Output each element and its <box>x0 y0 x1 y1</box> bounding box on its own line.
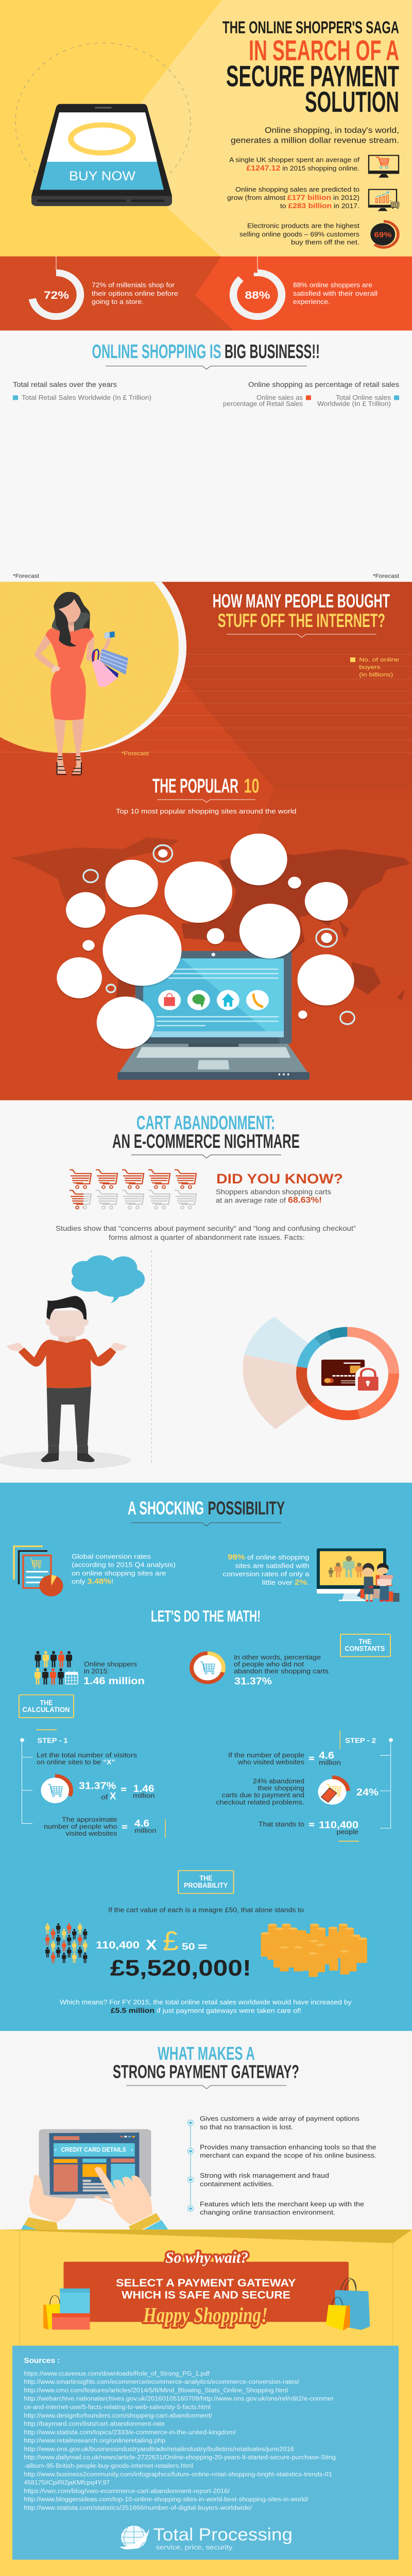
text: global conversion: on online shopping sites are <box>72 1570 166 1577</box>
feature 3: containment activities. <box>200 2180 274 2188</box>
step 2: who visited websites <box>237 1758 304 1766</box>
source links: http://www.ons.gov.uk/businessindustryandtrade/retailindustry/bulletins/retailsales/june2016 <box>24 2445 294 2452</box>
icon: gift boxes and bag <box>43 2289 90 2330</box>
text: global conversion: Global conversion rates <box>72 1553 151 1560</box>
text: global conversion <box>72 1553 176 1586</box>
intro text: generates a million dollar revenue stream. <box>231 135 399 145</box>
text: studies <box>56 1225 356 1242</box>
equation: percentage of X <box>79 1781 154 1802</box>
heading: the popular 10: THE POPULAR <box>152 774 238 797</box>
label: the constants: THE <box>358 1638 371 1646</box>
result: people <box>259 1820 359 1842</box>
intro text <box>231 126 399 145</box>
panel: cart abandonment <box>0 1100 412 1483</box>
text: satisfied sites: sites are satisfied with <box>235 1562 309 1569</box>
icon: smartphone with buy now <box>31 104 172 206</box>
panel: strong payment gateway <box>0 2031 412 2230</box>
source links: http://www.dailymail.co.uk/news/article-2722631/Online-shopping-20-years-It-started-secure-purchase-Sting <box>24 2453 336 2461</box>
heading <box>213 591 390 637</box>
text: so why wait: So why wait? <box>165 2249 248 2266</box>
banner <box>64 2262 349 2322</box>
chart: 24% gauge <box>316 1777 348 1806</box>
source links: http://www.retailresearch.org/onlineretailing.php <box>24 2437 165 2444</box>
heading <box>113 2043 299 2089</box>
icon: report with pie <box>14 1546 63 1597</box>
chart legend: total retail sales: Total Retail Sales Worldwide (In £ Trillion) <box>22 394 151 401</box>
feature 1: Gives customers a wide array of payment options <box>200 2115 359 2123</box>
title <box>222 18 399 118</box>
stat: electronics: buy them off the net. <box>291 239 359 246</box>
chart legend: total retail sales <box>13 381 151 401</box>
chart legend: online percentage: percentage of Retail Sales <box>223 400 303 408</box>
text: cart value: If the cart value of each is a meagre £50, that alone stands to <box>108 1906 304 1913</box>
text: satisfied sites: conversion rates of only a <box>223 1570 310 1578</box>
result: people: That stands to <box>259 1820 304 1828</box>
panel: call to action <box>0 2230 412 2576</box>
icon: monitor with cart <box>368 156 399 178</box>
heading: A SHOCKING <box>128 1498 204 1519</box>
source links: -album-95-British-people-buy-goods-internet-retailers.html <box>24 2462 193 2469</box>
text: did not abandon: of people who did not <box>234 1660 304 1668</box>
illustration: tablet with credit card form: › <box>131 2146 133 2153</box>
icon: smartphone with buy now: BUY NOW <box>69 168 136 183</box>
icon: shopping bags <box>326 2278 370 2330</box>
chart legend: online percentage <box>223 381 399 408</box>
footnote: *Forecast <box>122 750 149 757</box>
step 1: on online sites to be “X” <box>37 1758 115 1766</box>
stat: UK shopper spend: £1247.12 in 2015 shopping online. <box>246 164 359 173</box>
icon: credit card and lock <box>321 1360 381 1392</box>
label: the constants: CONSTANTS <box>345 1645 385 1653</box>
chart legend: online percentage: Online shopping as percentage of retail sales <box>248 381 399 389</box>
source links: http://www.bloggersideas.com/top-10-online-shopping-sites-in-world-best-shopping-sites-in-world/ <box>24 2496 308 2503</box>
logo: Total Processing: service, price, security <box>156 2544 233 2551</box>
label: the constants <box>340 1634 390 1656</box>
result: approximate visitors: number of people who <box>44 1823 117 1830</box>
chart legend: total retail sales: Total retail sales over the years <box>13 381 117 389</box>
text: satisfied shoppers: experience. <box>293 298 330 306</box>
equation: percentage of X: of <box>101 1793 108 1801</box>
feature 2 <box>187 2144 376 2159</box>
text: shoppers in 2015: in 2015: <box>84 1668 109 1675</box>
text: which means: if just payment gateways were taken care of! <box>157 2007 301 2014</box>
heading <box>112 1112 300 1158</box>
intro text: Online shopping, in today's world, <box>265 126 399 135</box>
source links: http://baymard.com/lists/cart-abandonment-rate <box>24 2420 165 2427</box>
chart: 69% donut <box>369 222 398 247</box>
source links: http://www.statista.com/topics/2333/e-commerce-in-the-united-kingdom/ <box>24 2428 236 2436</box>
text: which means <box>60 1998 352 2015</box>
heading: CART ABANDONMENT: <box>136 1112 275 1133</box>
heading: POSSIBILITY <box>208 1498 285 1519</box>
panel: stat band <box>0 257 412 331</box>
icon: crowd pictogram <box>45 1923 87 1963</box>
dashed circle behind phone <box>15 43 191 201</box>
callout: did you know: Shoppers abandon shopping carts <box>216 1189 331 1196</box>
stat: sales growth: to £283 billion in 2017. <box>280 202 359 210</box>
source links: https://www.ccavenue.com/downloads/Role_of_Strong_PG_1.pdf <box>24 2369 210 2377</box>
icon: monitor with chart and cart <box>368 190 399 211</box>
illustration: thinking man <box>0 1256 145 1469</box>
heading: the popular 10: 10 <box>244 774 260 797</box>
illustration: tablet with credit card form: ‹ <box>55 2146 57 2153</box>
feature 4 <box>187 2200 364 2216</box>
panel: shocking possibility and maths <box>0 1483 412 2031</box>
chart: 88% gauge: 88% <box>245 289 270 301</box>
feature 3: Strong with risk management and fraud <box>200 2172 329 2179</box>
step 2: their shopping <box>258 1785 304 1792</box>
feature 4: changing online transaction environment. <box>200 2209 335 2216</box>
chart legend: online percentage: Total Online sales <box>336 394 391 401</box>
equation: total lost value: X <box>146 1937 157 1953</box>
stat: sales growth: grow (from almost £177 billion in 2012) <box>227 194 359 202</box>
feature 4: Features which lets the merchant keep up with the <box>200 2200 364 2208</box>
text: global conversion: only 3.48%! <box>72 1578 113 1586</box>
label: the calculation <box>19 1695 74 1718</box>
chart legend: online percentage: Worldwide (In £ Trillion) <box>317 400 391 408</box>
speech cloud <box>72 1256 145 1303</box>
chart: abandonment reasons donut <box>243 1317 393 1429</box>
chart legend: online buyers: buyers <box>359 664 380 670</box>
panel: sources <box>12 2346 399 2560</box>
source links: ce-and-internet-use/5-facts-relating-to-web-sales/sty-5-facts.html <box>24 2403 211 2411</box>
map: world silhouette <box>10 837 410 1004</box>
step 1 <box>20 1730 166 1838</box>
illustration: site bubbles <box>57 834 354 1050</box>
label: the calculation: CALCULATION <box>22 1706 70 1714</box>
step 2: 4.6 <box>319 1750 334 1761</box>
text: satisfied sites: 98% of online shopping <box>228 1553 309 1562</box>
circle backdrop <box>0 582 186 753</box>
heading <box>128 1498 285 1526</box>
result: approximate visitors: million <box>134 1827 157 1834</box>
feature 2: merchant can expand the scope of his online business. <box>200 2152 376 2159</box>
text: millenials: their options online before <box>92 290 178 297</box>
text: happy shopping: Happy Shopping! <box>143 2303 268 2327</box>
equation: total lost value: £5,520,000! <box>110 1955 251 1980</box>
illustration: laptop with site icons <box>117 951 310 1080</box>
result: approximate visitors: The approximate <box>62 1816 117 1823</box>
source links <box>24 2369 336 2511</box>
chart legend: online buyers <box>350 656 399 678</box>
text: satisfied shoppers: 88% online shoppers are <box>293 281 372 289</box>
result: people: 110,400 <box>319 1820 358 1831</box>
source links: 458175#CpiRI2jaKMfcpq4Y.97 <box>24 2479 110 2486</box>
panel: sources: Sources : <box>24 2357 60 2365</box>
logo: Total Processing: Total Processing <box>153 2524 293 2545</box>
stat: electronics: Electronic products are the highest <box>247 222 359 229</box>
step 2: million <box>319 1759 341 1766</box>
heading: WHAT MAKES A <box>158 2043 255 2064</box>
step 2: checkout related problems. <box>216 1799 304 1806</box>
step 1: Let the total number of visitors <box>37 1751 137 1759</box>
callout: did you know: at an average rate of 68.63%! <box>216 1195 322 1205</box>
step 2: carts due to payment and <box>222 1791 304 1799</box>
feature 1: so that no transaction is lost. <box>200 2124 293 2131</box>
text: satisfied shoppers <box>293 281 377 306</box>
result: people: people <box>337 1828 358 1836</box>
text: shoppers in 2015: 1.46 million <box>83 1676 145 1687</box>
callout: did you know: DID YOU KNOW? <box>216 1171 343 1187</box>
feature 1 <box>187 2115 359 2131</box>
text: millenials <box>92 281 178 306</box>
panel: how many people <box>0 541 412 1100</box>
result: approximate visitors: visited websites <box>65 1830 117 1837</box>
text: select a gateway: WHICH IS SAFE AND SECURE <box>122 2289 290 2301</box>
illustration: woman with bags <box>35 592 128 775</box>
heading: let's do the math: LET'S DO THE MATH! <box>151 1607 261 1625</box>
text: millenials: going to a store. <box>92 298 144 306</box>
chart legend: online buyers: (in billions) <box>359 671 393 678</box>
heading: BIG BUSINESS!! <box>225 341 320 363</box>
stat: UK shopper spend: A single UK shopper spent an average of <box>229 156 359 163</box>
timeline: gateway features <box>187 2115 376 2216</box>
text: studies: forms almost a quarter of abandonment rate issues. Facts: <box>109 1234 305 1242</box>
text: studies: Studies show that “concerns about payment security” and “long and confusing checkout” <box>56 1225 356 1233</box>
equation: total lost value: £ <box>163 1926 179 1956</box>
text: did not abandon: In other words, percentage <box>234 1653 321 1661</box>
source links: https://vwo.com/blog/vwo-ecommerce-cart-abandonment-report-2016/ <box>24 2487 230 2495</box>
text: global conversion: (according to 2015 Q4 analysis) <box>72 1561 176 1568</box>
chart: 88% gauge <box>233 257 282 316</box>
footnotes <box>13 573 400 579</box>
heading: ONLINE SHOPPING IS <box>92 341 221 363</box>
text: shoppers in 2015: Online shoppers <box>84 1660 137 1668</box>
step 2 <box>216 1730 393 1842</box>
result: approximate visitors: 4.6 <box>134 1819 149 1829</box>
heading: the popular 10: Top 10 most popular shopping sites around the world <box>116 807 296 815</box>
illustration: tablet with credit card form <box>21 2129 168 2230</box>
label: the calculation: THE <box>40 1699 53 1707</box>
text: satisfied shoppers: satisfied with their overall <box>293 290 377 297</box>
callout: did you know <box>216 1171 343 1205</box>
label: the probability: THE <box>200 1874 213 1883</box>
panel: big business <box>0 331 412 582</box>
text: select a gateway: SELECT A PAYMENT GATEWAY <box>116 2276 296 2289</box>
source links: http://www.smartinsights.com/ecommerce/ecommerce-analytics/ecommerce-conversion-rates/ <box>24 2378 299 2385</box>
chart: 72% gauge: 72% <box>44 289 69 301</box>
icon: abandoned cart pictogram <box>70 1170 196 1209</box>
source links: http://www.statista.com/statistics/251666/number-of-digital-buyers-worldwide/ <box>24 2504 252 2511</box>
icon: monitor with shoppers <box>317 1548 400 1602</box>
equation: percentage of X: million <box>133 1792 154 1799</box>
source links: http://www.business2community.com/infographics/future-online-retail-shopping-bright-statistics-trends-01 <box>24 2470 332 2478</box>
equation: total lost value: 110,400 <box>96 1940 140 1951</box>
stat: sales growth <box>227 186 359 210</box>
equation: percentage of X: 31.37% <box>79 1781 116 1791</box>
chart: 31.37% donut <box>192 1653 224 1682</box>
text: did not abandon: 31.37% <box>234 1676 272 1687</box>
chart legend: online percentage: Online sales as <box>256 394 303 401</box>
equation: percentage of X: X <box>110 1791 116 1802</box>
footnotes: *Forecast <box>373 573 400 579</box>
step 2: 24% abandoned <box>253 1777 304 1785</box>
stat: sales growth: Online shopping sales are predicted to <box>235 186 359 193</box>
source links: http://www.designforfounders.com/shopping-cart-abandonment/ <box>24 2412 212 2419</box>
step 2: STEP - 2 <box>345 1737 376 1745</box>
text: satisfied sites <box>223 1553 310 1587</box>
illustration: tablet with credit card form: CREDIT CARD DETAILS <box>61 2146 126 2153</box>
stat: UK shopper spend <box>229 156 359 173</box>
equation: percentage of X: 1.46 <box>133 1784 154 1794</box>
text: satisfied sites: little over 2%. <box>262 1579 310 1587</box>
text: shoppers in 2015 <box>83 1660 145 1687</box>
result: approximate visitors <box>44 1816 166 1838</box>
text: millenials: 72% of millenials shop for <box>92 281 175 289</box>
text: which means: £5.5 million <box>111 2007 154 2015</box>
equation: total lost value <box>96 1926 251 1980</box>
chart: 31.37% gauge <box>39 1776 71 1805</box>
equation: total lost value: 50 <box>182 1942 195 1952</box>
stat: electronics <box>239 222 359 246</box>
icon: coin stacks <box>261 1924 367 1977</box>
heading: the popular 10 <box>116 774 297 815</box>
text: select a gateway <box>116 2276 296 2301</box>
step 1: STEP - 1 <box>37 1737 68 1745</box>
feature 3 <box>187 2172 329 2188</box>
label: the probability: PROBABILITY <box>184 1882 228 1890</box>
source links: http://www.cmo.com/features/articles/2014/5/6/Mind_Blowing_Stats_Online_Shopping.html <box>24 2386 288 2394</box>
chart: 69% donut: 69% <box>374 231 392 239</box>
chart: 72% gauge <box>32 257 80 316</box>
source links: http://webarchive.nationalarchives.gov.uk/20160105160709/http://www.ons.gov.uk/ons/rel/rdit2/e-commer <box>24 2395 334 2402</box>
text: did not abandon: abandon their shopping carts <box>234 1668 329 1675</box>
step 2: If the number of people <box>228 1751 304 1759</box>
stat: electronics: selling online goods – 69% customers <box>239 230 359 238</box>
footnotes: *Forecast <box>13 573 40 579</box>
text: did not abandon <box>234 1653 329 1687</box>
logo: Total Processing <box>119 2524 293 2551</box>
chart legend: online buyers: No. of online <box>359 656 399 663</box>
step 2: 24% <box>356 1787 379 1798</box>
label: the probability <box>178 1871 234 1893</box>
icon: shopper pictogram and calendar <box>35 1651 78 1685</box>
panel: hero <box>0 0 412 257</box>
feature 2: Provides many transaction enhancing tools so that the <box>200 2144 376 2151</box>
text: which means: Which means? For FY 2015, the total online retail sales worldwide would have increased by <box>60 1998 352 2006</box>
